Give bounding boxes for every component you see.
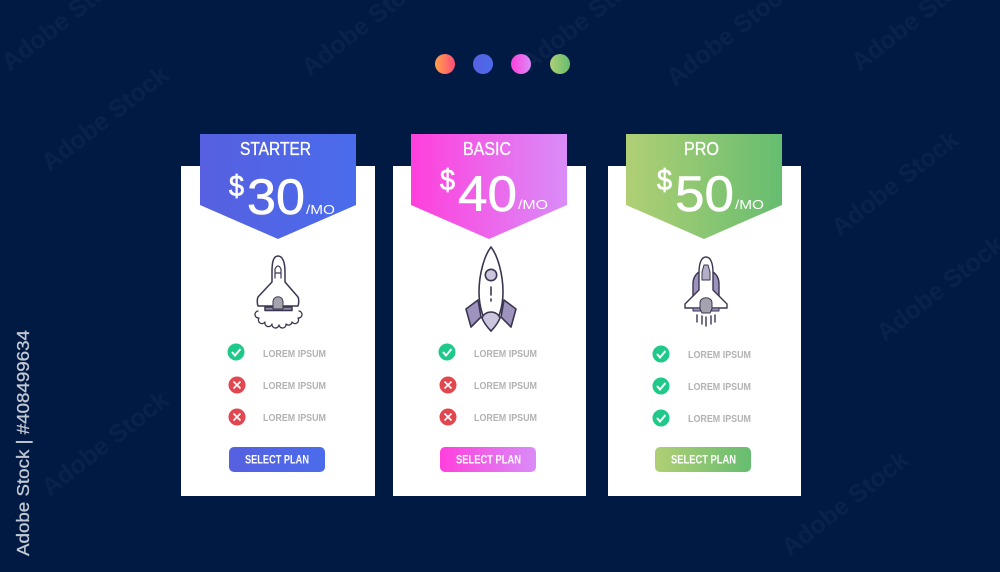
check icon <box>652 346 670 362</box>
panel: basic <box>393 134 586 496</box>
pro price <box>657 164 764 222</box>
feature labels: LOREM IPSUM <box>263 348 326 360</box>
feature labels: LOREM IPSUM <box>688 381 751 393</box>
cross icon <box>440 376 456 394</box>
feature labels: LOREM IPSUM <box>474 348 537 360</box>
check icon <box>652 410 670 426</box>
icon: shuttle with smoke <box>255 256 302 328</box>
feature labels <box>263 348 326 424</box>
pro button: SELECT PLAN <box>671 454 736 466</box>
basic features <box>438 344 537 426</box>
basic ribbon <box>411 134 567 239</box>
feature labels: LOREM IPSUM <box>688 349 751 361</box>
icon: shuttle with boosters <box>685 257 727 326</box>
panel: starter <box>181 134 375 496</box>
feature labels: LOREM IPSUM <box>263 412 326 424</box>
watermarks: Adobe Stock <box>36 386 174 502</box>
pro button <box>655 447 751 472</box>
check icon <box>438 344 456 360</box>
starter button <box>229 447 325 472</box>
basic price <box>440 164 548 222</box>
starter price <box>229 169 335 225</box>
watermarks: Adobe Stock <box>36 61 174 177</box>
basic card <box>393 166 586 496</box>
starter price: $ <box>229 170 244 203</box>
basic price: /MO <box>518 197 548 212</box>
starter button: SELECT PLAN <box>245 454 309 466</box>
cross icon <box>440 408 456 426</box>
feature labels: LOREM IPSUM <box>263 380 326 392</box>
pro card <box>608 166 801 496</box>
watermarks: Adobe Stock <box>776 446 914 562</box>
check icon <box>652 378 670 394</box>
icon: rocket <box>466 247 516 331</box>
feature labels <box>474 348 537 424</box>
watermarks: Adobe Stock <box>826 126 964 242</box>
feature labels: LOREM IPSUM <box>474 380 537 392</box>
starter price: /MO <box>306 202 335 217</box>
starter ribbon <box>200 134 356 239</box>
stock id text: Adobe Stock | #408499634 <box>13 330 33 556</box>
pro price: 50 <box>675 166 734 222</box>
starter card <box>181 166 375 496</box>
pro price: $ <box>657 164 672 197</box>
starter price: 30 <box>247 169 305 225</box>
basic price: 40 <box>458 166 517 222</box>
check icon <box>228 344 244 360</box>
feature labels <box>688 349 751 425</box>
starter features <box>228 344 326 426</box>
feature labels: LOREM IPSUM <box>688 413 751 425</box>
pagination dots <box>435 54 570 74</box>
panel: pro <box>608 134 801 496</box>
pro title: PRO <box>684 139 719 159</box>
cross icon <box>228 408 246 426</box>
cross icon <box>228 376 246 394</box>
basic price: $ <box>440 164 455 197</box>
feature labels: LOREM IPSUM <box>474 412 537 424</box>
basic title: BASIC <box>463 139 511 159</box>
pro price: /MO <box>735 197 764 212</box>
starter title: STARTER <box>240 139 311 159</box>
basic button <box>440 447 536 472</box>
basic button: SELECT PLAN <box>456 454 521 466</box>
pro ribbon <box>626 134 782 239</box>
pro features <box>652 346 751 426</box>
